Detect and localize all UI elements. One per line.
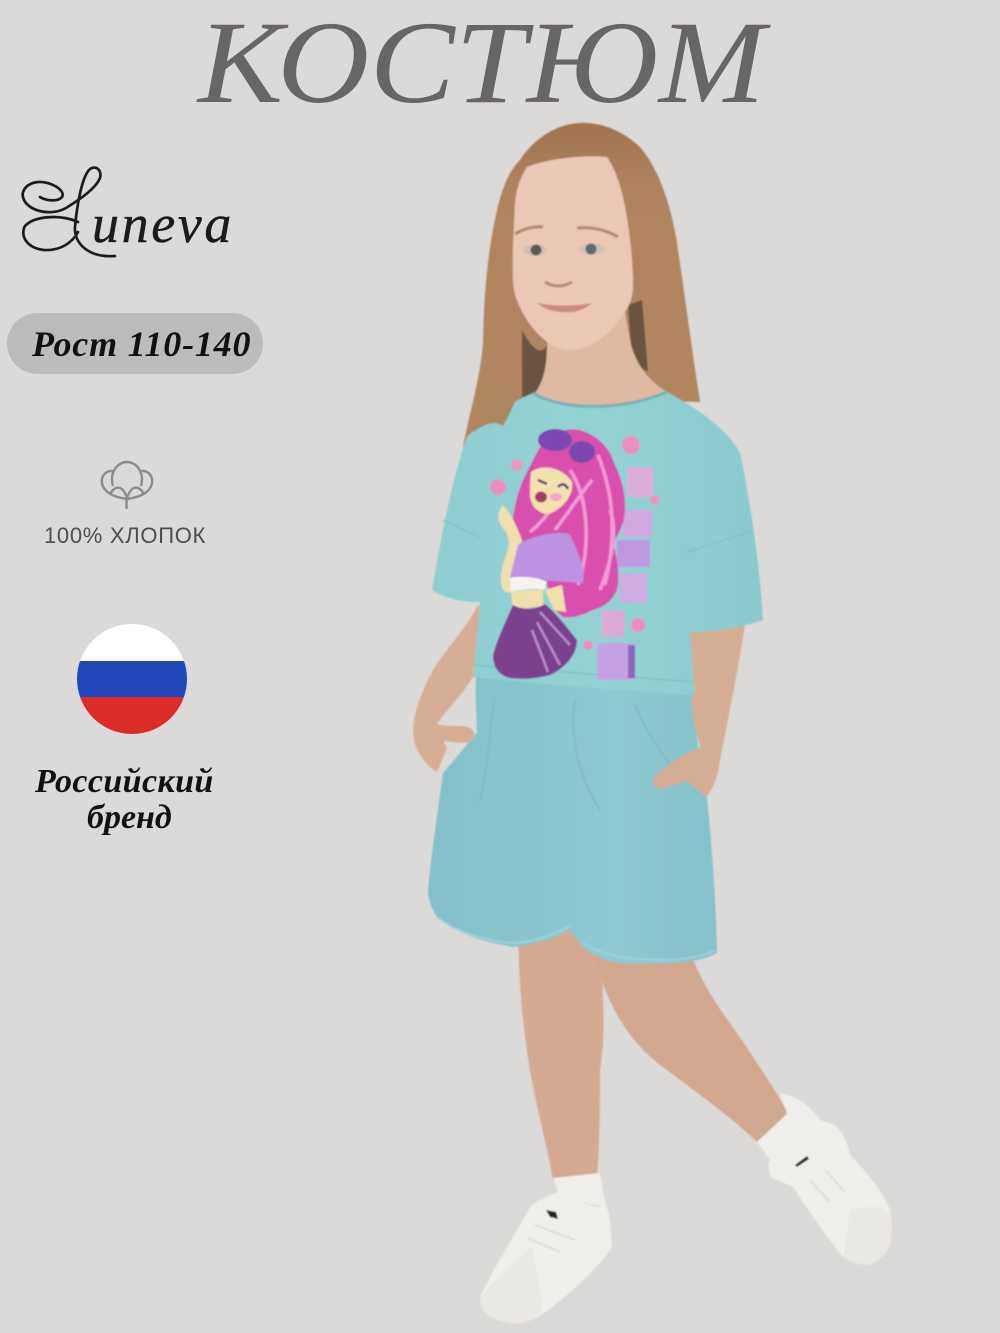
print lettering	[597, 467, 653, 680]
t-shirt print: anime girl	[490, 429, 660, 680]
arm right with hand in pocket	[653, 625, 745, 797]
print skirt	[493, 604, 577, 679]
neck and face	[513, 156, 667, 406]
print white knot	[510, 577, 547, 592]
icon: cotton boll	[100, 460, 154, 509]
right shoe	[768, 1093, 892, 1265]
print hair	[510, 429, 625, 617]
print raised arm and hand	[498, 505, 522, 592]
print face	[530, 467, 572, 514]
print midriff	[511, 590, 543, 610]
brand logo	[21, 166, 234, 258]
flag blue band	[77, 661, 187, 697]
brand origin text: бренд	[87, 799, 172, 836]
left leg	[518, 915, 604, 1180]
title: КОСТЮМ	[198, 0, 766, 128]
shorts	[428, 665, 717, 964]
t-shirt	[432, 392, 763, 695]
hair tip over shirt	[473, 395, 518, 432]
brand origin text	[35, 763, 214, 836]
icon: russian flag	[77, 624, 187, 734]
hair	[463, 123, 700, 447]
cotton label: 100% ХЛОПОК	[44, 523, 206, 548]
facial features	[515, 227, 618, 312]
left shoe	[480, 1192, 612, 1323]
size pill	[7, 313, 263, 374]
print hearts	[490, 479, 506, 495]
socks	[553, 1113, 806, 1207]
print top	[510, 533, 584, 583]
brand origin text: Российский	[35, 763, 214, 800]
right leg	[590, 930, 788, 1142]
arm left with hand in pocket	[413, 605, 490, 772]
flag red band	[77, 697, 187, 734]
brand logo: uneva	[92, 194, 234, 254]
size text: Рост 110-140	[32, 324, 251, 364]
print sunglasses	[538, 429, 572, 451]
